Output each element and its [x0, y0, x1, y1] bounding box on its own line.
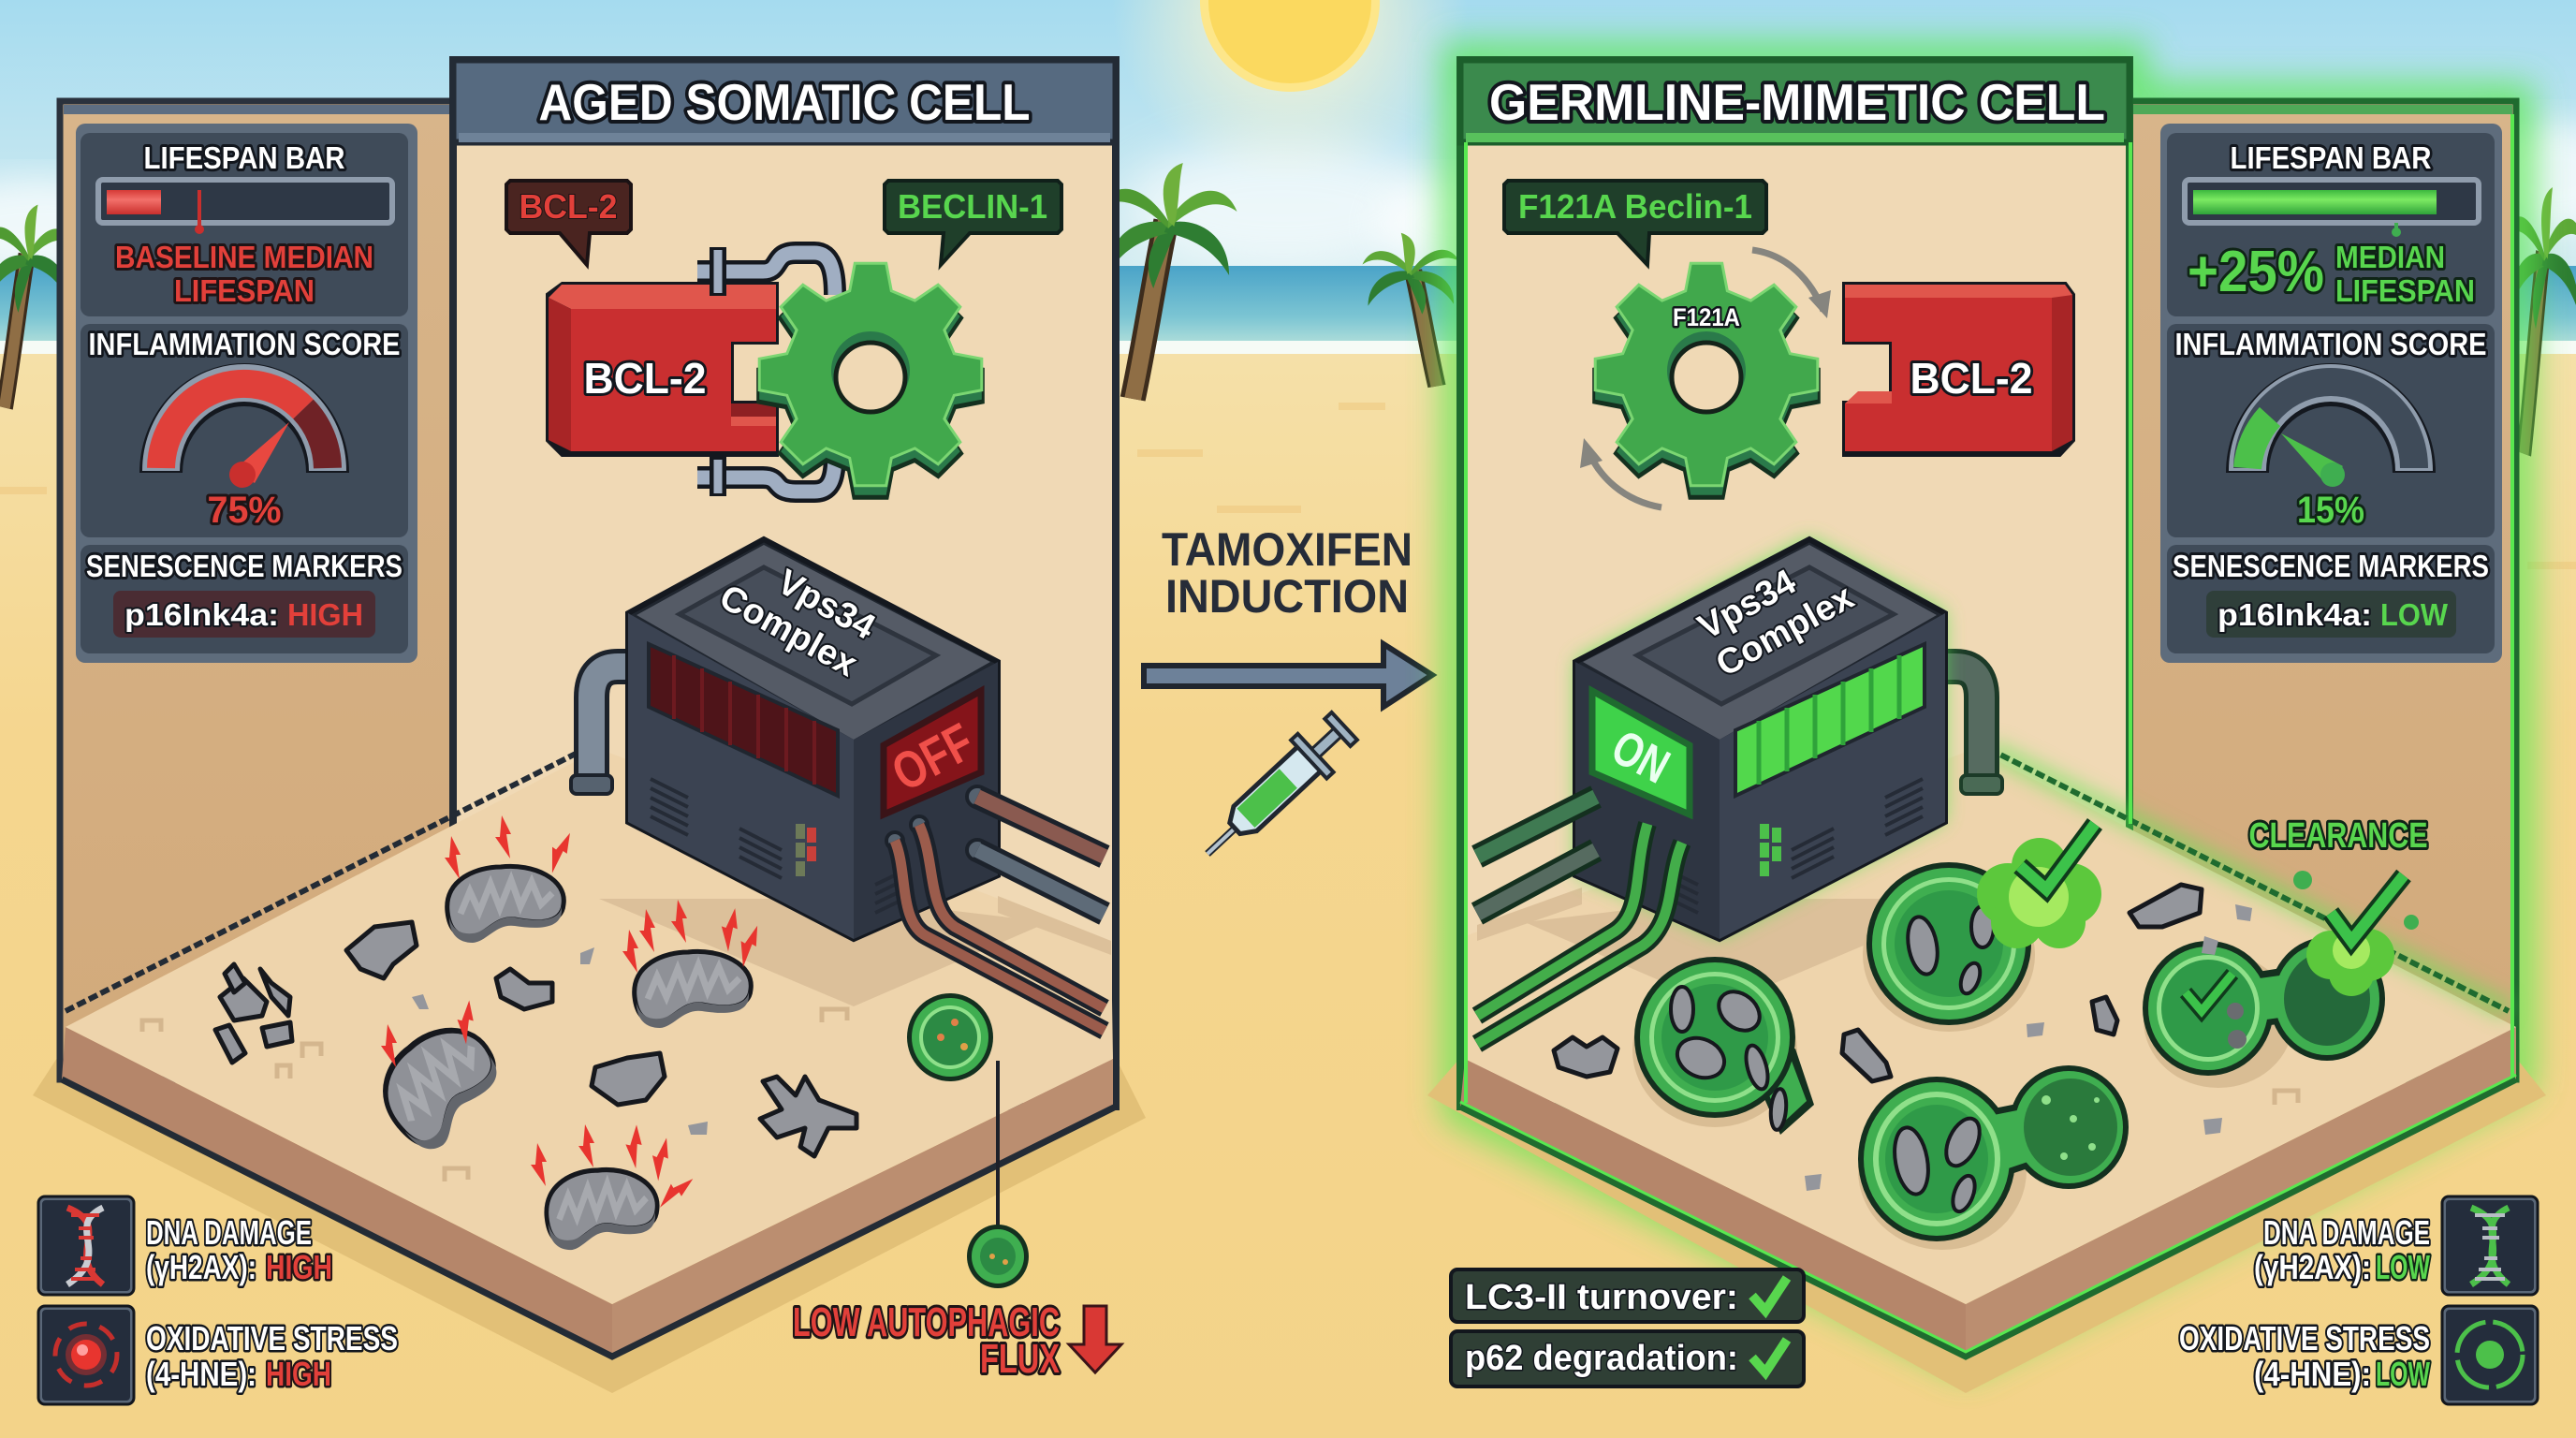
pill: p62 degradation: p62 degradation:	[1465, 1339, 1738, 1378]
gauge: 15%	[2247, 382, 2414, 487]
clamp: bottom	[697, 454, 835, 496]
palm tree: far right	[2506, 187, 2576, 454]
value: 75%: 75%	[208, 490, 281, 531]
heading: aged somatic cell: AGED SOMATIC CELL	[539, 73, 1030, 131]
text: oxidative stress high	[146, 1319, 398, 1393]
tag: BECLIN-1	[885, 181, 1061, 265]
pill: LC3-II turnover: LC3-II turnover:	[1465, 1278, 1738, 1317]
pill: p16Ink4a low	[2206, 591, 2456, 638]
label: senescence markers: SENESCENCE MARKERS	[2173, 549, 2489, 583]
connector line	[996, 1061, 1000, 1228]
text: oxidative stress low: OXIDATIVE STRESS	[2179, 1319, 2430, 1357]
icon: oxidative stress low	[2442, 1306, 2538, 1404]
text: baseline median lifespan	[115, 240, 373, 308]
debris fragments	[215, 922, 856, 1156]
tag: F121A Beclin-1: F121A Beclin-1	[1518, 187, 1752, 226]
pill: p16Ink4a high: HIGH	[287, 597, 363, 632]
text: DNA damage low	[2254, 1213, 2430, 1286]
palm tree: far left	[0, 205, 74, 407]
text: oxidative stress low	[2179, 1319, 2430, 1393]
value: plus 25% median lifespan: LIFESPAN	[2335, 273, 2475, 308]
machine: Vps34 complex on: Vps34	[1691, 563, 1803, 648]
BCL-2 block, bound to gear: BCL-2	[584, 354, 706, 403]
icon: syringe	[1190, 707, 1362, 873]
pipe: left vps34	[571, 667, 637, 794]
machine: Vps34 complex on: ON	[1603, 720, 1678, 795]
BCL-2 block free: BCL-2	[1910, 354, 2033, 403]
arrow: rotation top	[1752, 250, 1831, 318]
tag: F121A Beclin-1	[1504, 181, 1766, 265]
lifespan bar	[98, 180, 392, 234]
heading: germline-mimetic cell: GERMLINE-MIMETIC CELL	[1489, 73, 2105, 131]
label: inflammation score: INFLAMMATION SCORE	[2175, 327, 2486, 361]
heading: tamoxifen induction	[1162, 523, 1412, 623]
small autophagosome	[967, 1225, 1029, 1288]
gear: F121A Beclin-1: F121A	[1673, 303, 1740, 331]
clamp: top	[697, 247, 835, 296]
autolysosome D: clearance	[2143, 871, 2419, 1088]
pill: LC3-II turnover	[1451, 1269, 1804, 1322]
gauge: 75%	[161, 383, 328, 488]
arrow: rotation bottom	[1580, 438, 1661, 507]
autolysosome C: fused	[1858, 1065, 2129, 1250]
pill: p16Ink4a high	[113, 591, 375, 638]
text: oxidative stress high: (4-HNE):	[146, 1355, 256, 1393]
value: plus 25% median lifespan	[2188, 240, 2475, 308]
wall header	[1460, 60, 2130, 142]
mitochondrion 2	[622, 900, 766, 1028]
panel: germline-mimetic cell chamber	[1427, 60, 2546, 1393]
text: low autophagic flux	[793, 1299, 1060, 1382]
machine glow	[1575, 537, 1945, 937]
burst	[2306, 929, 2394, 996]
gear: Beclin-1	[759, 263, 982, 497]
text: DNA damage high: HIGH	[266, 1248, 332, 1286]
text: low autophagic flux: FLUX	[980, 1336, 1060, 1382]
panel: aged HUD stats	[76, 124, 417, 663]
text: DNA damage low: (γH2AX):	[2254, 1248, 2371, 1286]
tubes: drained connections	[886, 786, 1105, 1031]
autophagosome B: fusing	[1863, 862, 2035, 1032]
value: plus 25% median lifespan: +25%	[2188, 240, 2324, 304]
label: lifespan bar: LIFESPAN BAR	[144, 140, 345, 175]
label: lifespan bar: LIFESPAN BAR	[2230, 140, 2432, 175]
autophagosome: low flux	[907, 993, 993, 1081]
machine: Vps34 complex off: Complex	[713, 578, 863, 684]
text: low autophagic flux: LOW AUTOPHAGIC	[793, 1299, 1060, 1345]
mitochondrion 4	[531, 1123, 697, 1250]
text: clearance: CLEARANCE	[2248, 816, 2428, 856]
palm tree: centre left	[1102, 163, 1237, 399]
text: baseline median lifespan: LIFESPAN	[174, 273, 315, 308]
mitochondrion 3	[365, 999, 518, 1160]
BCL-2 block, bound to gear	[549, 285, 776, 454]
tag: BCL-2	[506, 181, 631, 265]
gear: F121A Beclin-1	[1595, 263, 1818, 497]
mitochondrion 1	[445, 815, 578, 943]
wall header	[453, 60, 1116, 142]
text: DNA damage low: LOW	[2376, 1248, 2430, 1286]
text: DNA damage high: (γH2AX):	[146, 1248, 256, 1286]
pill: p16Ink4a low: LOW	[2380, 597, 2449, 632]
sun	[1112, 0, 1468, 183]
text: oxidative stress high: OXIDATIVE STRESS	[146, 1319, 398, 1357]
arrow: induction	[1144, 644, 1432, 707]
lifespan bar	[2185, 180, 2479, 237]
text: DNA damage high: DNA DAMAGE	[146, 1213, 312, 1252]
damaged mitochondria and sparks	[215, 815, 856, 1250]
machine: Vps34 complex off: OFF	[883, 712, 983, 802]
label: senescence markers: SENESCENCE MARKERS	[86, 549, 402, 583]
heading: tamoxifen induction: TAMOXIFEN	[1162, 523, 1412, 576]
icon: DNA damage high	[38, 1196, 134, 1295]
icon: DNA damage low	[2442, 1196, 2538, 1295]
machine: Vps34 complex off	[628, 539, 998, 939]
text: oxidative stress low: (4-HNE):	[2254, 1355, 2371, 1393]
BCL-2 block free	[1845, 285, 2072, 454]
heading: tamoxifen induction: INDUCTION	[1165, 570, 1409, 623]
machine: Vps34 complex on: Complex	[1710, 578, 1860, 684]
debris fragments	[1554, 885, 2252, 1191]
panel: germline HUD stats	[2160, 124, 2502, 663]
arrow: low flux down	[1069, 1306, 1121, 1372]
tag: BECLIN-1: BECLIN-1	[898, 187, 1047, 226]
palm tree: centre right	[1363, 233, 1459, 386]
value: plus 25% median lifespan: MEDIAN	[2335, 240, 2445, 274]
value: 15%: 15%	[2297, 490, 2364, 531]
pill: p16Ink4a low: p16Ink4a:	[2217, 597, 2372, 632]
label: inflammation score: INFLAMMATION SCORE	[88, 327, 401, 361]
pill: p16Ink4a high: p16Ink4a:	[124, 597, 279, 632]
panel: aged somatic cell chamber	[33, 60, 1146, 1393]
machine: Vps34 complex off: Vps34	[770, 563, 882, 648]
icon: oxidative stress high	[38, 1306, 134, 1404]
floor scuffs: aged	[142, 1009, 847, 1181]
green glow halo	[1460, 60, 2516, 1357]
pipe: right vps34	[1937, 667, 2002, 794]
text: DNA damage low: DNA DAMAGE	[2263, 1213, 2430, 1252]
text: oxidative stress high: HIGH	[266, 1355, 331, 1393]
pill: p62 degradation	[1451, 1331, 1804, 1387]
text: DNA damage high	[146, 1213, 332, 1286]
floor scuffs: germline	[2275, 1091, 2298, 1105]
text: baseline median lifespan: BASELINE MEDIAN	[115, 240, 373, 274]
machine: Vps34 complex on	[1575, 539, 1945, 939]
burst with check	[1977, 824, 2101, 948]
text: oxidative stress low: LOW	[2376, 1355, 2430, 1393]
tag: BCL-2: BCL-2	[519, 187, 618, 226]
tubes: active connections	[1477, 797, 1682, 1044]
autophagosome A: engulfing	[1632, 957, 1814, 1135]
